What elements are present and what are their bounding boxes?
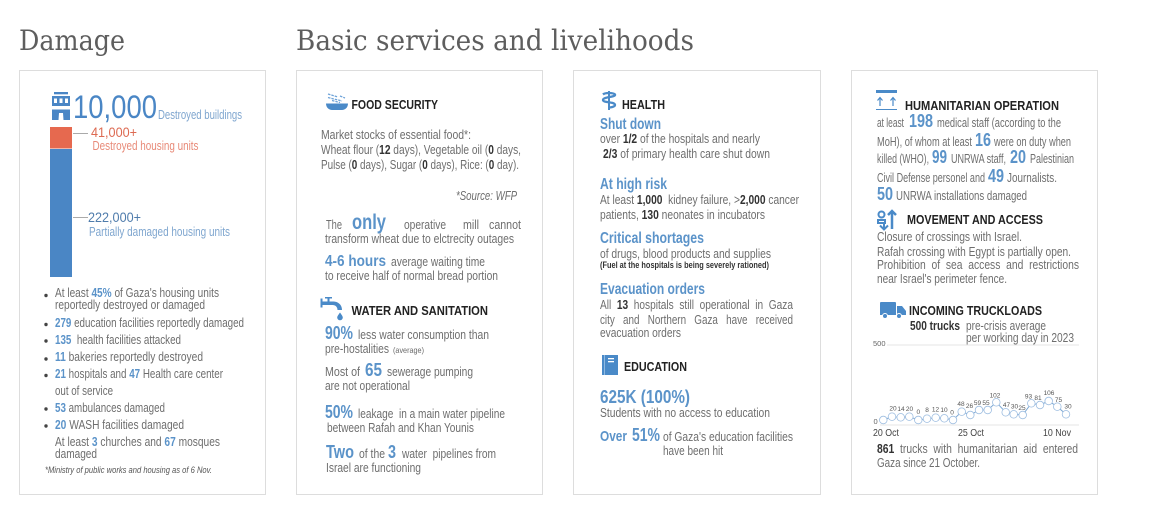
- footnote: ministry source: *Ministry of public works and housing as of 6 Nov.: [45, 465, 212, 475]
- text: staff killed figures: 50: [877, 184, 893, 204]
- callout: only operative mill: only: [352, 211, 386, 234]
- list: damage figures: 11 bakeries reportedly destroyed: [55, 350, 203, 364]
- callout: only operative mill: The: [326, 218, 342, 232]
- block: shut down: Shut down: [600, 116, 661, 133]
- text: staff killed figures: medical staff (according to the: [937, 116, 1061, 130]
- text: staff killed figures: [877, 111, 1074, 204]
- block: at high risk: patients, 130 neonates in incubators: [600, 208, 765, 222]
- block: at high risk: [600, 176, 800, 222]
- text: staff killed figures: at least: [877, 116, 904, 130]
- text: staff killed figures: Palestinian: [1030, 152, 1074, 166]
- chart: daily incoming trucks: 10: [940, 407, 948, 414]
- heading: incoming truckloads: INCOMING TRUCKLOADS: [909, 303, 1042, 318]
- text: market stocks: Wheat flour (12 days), Vegetable oil (0 days,: [321, 143, 521, 157]
- heading: food security: FOOD SECURITY: [352, 97, 438, 112]
- text: staff killed figures: 198: [909, 111, 933, 131]
- icon: truck: [880, 302, 906, 318]
- stat: water pipelines: Israel are functioning: [326, 461, 421, 475]
- text: market stocks: *Source: WFP: [456, 189, 517, 203]
- block: evacuation orders: city and Northern Gaza have received: [600, 313, 793, 327]
- text: staff killed figures: Civil Defense personel and: [877, 171, 985, 185]
- chart: daily incoming trucks: 25: [1018, 405, 1026, 412]
- stat: water consumption: 90%: [325, 323, 353, 343]
- block: evacuation orders: [600, 281, 794, 340]
- stat: destroyed housing units: 41,000+: [91, 124, 137, 140]
- stat: destroyed housing units: Destroyed housing units: [92, 139, 198, 153]
- stat: pre-crisis average: [910, 319, 1074, 345]
- chart: daily incoming trucks: 102: [990, 392, 1001, 400]
- text: crossings and restrictions: Rafah crossing with Egypt is partially open.: [877, 245, 1071, 259]
- stat: pre-crisis average: pre-crisis average: [966, 319, 1046, 333]
- text: market stocks: Market stocks of essential food*:: [321, 128, 471, 142]
- stat: partially damaged housing units: [88, 209, 230, 239]
- panel: health, education: [574, 70, 820, 494]
- icon: medical staff: [603, 91, 615, 110]
- block: shut down: 2/3 of primary health care shut down: [603, 147, 770, 161]
- callout: bread waiting time: 4-6 hours: [325, 253, 386, 270]
- text: staff killed figures: 49: [988, 166, 1004, 186]
- block: critical shortages: [600, 230, 771, 270]
- text: crossings and restrictions: near Israel's perimeter fence.: [877, 272, 1007, 286]
- text: market stocks: [321, 128, 521, 203]
- heading: humanitarian operation: HUMANITARIAN OPERATION: [905, 98, 1059, 113]
- text: crossings and restrictions: Closure of crossings with Israel.: [877, 230, 1022, 244]
- list: damage figures: 20 WASH facilities damaged: [55, 418, 184, 432]
- text: staff killed figures: Journalists.: [1007, 171, 1057, 185]
- block: evacuation orders: Evacuation orders: [600, 281, 705, 298]
- text: crossings and restrictions: Prohibition of sea access and restrictions: [877, 258, 1079, 272]
- text: trucks entered: [877, 442, 1078, 470]
- callout: only operative mill: [325, 211, 521, 246]
- stat: water consumption: pre-hostalities: [325, 342, 389, 356]
- heading: education: EDUCATION: [624, 359, 687, 374]
- icon: book: [602, 355, 618, 375]
- stat: pipeline leakage: leakage in a main water pipeline: [358, 407, 505, 421]
- chart: daily incoming trucks: 20 Oct: [873, 428, 899, 439]
- block: at high risk: At high risk: [600, 176, 667, 193]
- chart: daily incoming trucks: [873, 339, 1079, 439]
- stat: destroyed buildings: Destroyed buildings: [158, 108, 242, 122]
- chart: daily incoming trucks: 14: [897, 406, 905, 413]
- panel: food, water: [296, 70, 542, 494]
- stat: destroyed buildings: [73, 89, 242, 125]
- stat: students without access: 625K (100%): [600, 386, 690, 407]
- stat: water pipelines: water pipelines from: [401, 447, 496, 461]
- text: staff killed figures: killed (WHO),: [877, 152, 929, 166]
- text: staff killed figures: MoH), of whom at least: [877, 135, 972, 149]
- list: damage figures: 135 health facilities attacked: [55, 333, 181, 347]
- stat: sewerage pumping: [325, 359, 473, 393]
- icon: food bowl: [326, 94, 348, 110]
- chart: daily incoming trucks: 48: [957, 401, 965, 408]
- chart: daily incoming trucks: 26: [966, 403, 973, 410]
- heading: health: HEALTH: [622, 97, 665, 112]
- block: at high risk: At least 1,000 kidney failure, >2,000 cancer: [600, 193, 800, 207]
- chart: daily incoming trucks: 500: [873, 339, 886, 348]
- stat: pipeline leakage: [325, 402, 505, 435]
- text: market stocks: Pulse (0 days), Sugar (0 days), Rice: (0 day).: [321, 158, 519, 172]
- stat: sewerage pumping: 65: [365, 359, 382, 380]
- chart: housing units stacked bar: [50, 127, 88, 277]
- callout: only operative mill: mill: [463, 218, 479, 232]
- text: staff killed figures: were on duty when: [993, 135, 1071, 149]
- text: staff killed figures: 99: [932, 147, 947, 167]
- icon: building: [52, 92, 70, 120]
- list: damage figures: out of service: [55, 384, 113, 398]
- chart: daily incoming trucks: 81: [1034, 395, 1042, 402]
- stat: sewerage pumping: sewerage pumping: [387, 365, 473, 379]
- text: crossings and restrictions: [877, 230, 1079, 286]
- stat: sewerage pumping: Most of: [325, 365, 360, 379]
- stat: destroyed housing units: [91, 124, 198, 153]
- stat: pipeline leakage: between Rafah and Khan Younis: [327, 421, 474, 435]
- list: damage figures: damaged: [55, 447, 97, 461]
- block: critical shortages: Critical shortages: [600, 230, 704, 247]
- chart: daily incoming trucks: 30: [1064, 404, 1072, 410]
- callout: bread waiting time: to receive half of normal bread portion: [325, 269, 498, 283]
- heading: Basic services and livelihoods: Basic services and livelihoods: [296, 24, 694, 57]
- callout: bread waiting time: [325, 253, 498, 283]
- stat: water consumption: (average): [393, 345, 424, 355]
- list: damage figures: 279 education facilities reportedly damaged: [55, 316, 244, 330]
- stat: facilities hit: 51%: [632, 425, 660, 445]
- text: trucks entered: Gaza since 21 October.: [877, 456, 980, 470]
- chart: daily incoming trucks: 59: [974, 400, 981, 407]
- stat: destroyed buildings: 10,000: [73, 89, 157, 125]
- stat: facilities hit: of Gaza's education facilities: [663, 430, 793, 444]
- text: staff killed figures: 16: [975, 130, 991, 150]
- callout: only operative mill: cannot: [489, 218, 521, 232]
- callout: bread waiting time: average waiting time: [391, 255, 485, 269]
- list: damage figures: [44, 286, 244, 461]
- stat: pre-crisis average: per working day in 2023: [966, 331, 1074, 345]
- stat: pre-crisis average: 500 trucks: [910, 319, 960, 333]
- text: staff killed figures: UNRWA installations damaged: [896, 189, 1027, 203]
- stat: water pipelines: Two: [326, 441, 354, 462]
- stat: water pipelines: of the: [359, 447, 385, 461]
- stat: students without access: Students with no access to education: [600, 406, 770, 420]
- chart: daily incoming trucks: 0: [916, 409, 920, 416]
- chart: daily incoming trucks: 8: [925, 407, 929, 414]
- icon: humanitarian operation: [876, 90, 897, 110]
- list: damage figures: reportedly destroyed or damaged: [55, 298, 205, 312]
- text: trucks entered: 861 trucks with humanitarian aid entered: [877, 442, 1078, 456]
- stat: pipeline leakage: 50%: [325, 402, 353, 422]
- chart: daily incoming trucks: 106: [1044, 390, 1055, 397]
- block: shut down: over 1/2 of the hospitals and nearly: [600, 132, 761, 146]
- chart: daily incoming trucks: 25 Oct: [958, 428, 984, 439]
- chart: daily incoming trucks: 75: [1055, 397, 1062, 404]
- callout: only operative mill: operative: [404, 218, 446, 232]
- block: evacuation orders: evacuation orders: [600, 326, 681, 340]
- stat: partially damaged housing units: Partially damaged housing units: [89, 225, 230, 239]
- block: evacuation orders: All 13 hospitals still operational in Gaza: [600, 298, 794, 312]
- chart: daily incoming trucks: 55: [982, 400, 990, 407]
- block: critical shortages: (Fuel at the hospitals is being severely rationed): [600, 260, 769, 270]
- text: staff killed figures: UNRWA staff,: [951, 152, 1006, 166]
- chart: daily incoming trucks: 20: [889, 406, 897, 412]
- stat: facilities hit: [600, 425, 793, 458]
- panel: humanitarian, access, trucks: [852, 70, 1098, 494]
- stat: partially damaged housing units: 222,000+: [88, 209, 141, 225]
- block: shut down: [600, 116, 770, 161]
- icon: movement and access: [878, 211, 896, 230]
- heading: Damage: Damage: [19, 24, 125, 57]
- heading: water and sanitation: WATER AND SANITATION: [352, 303, 488, 318]
- stat: water pipelines: 3: [388, 441, 396, 462]
- stat: water consumption: [325, 323, 489, 356]
- chart: daily incoming trucks: 0: [950, 410, 954, 416]
- stat: sewerage pumping: are not operational: [325, 379, 410, 393]
- panel: damage: [20, 70, 266, 494]
- chart: daily incoming trucks: 20: [906, 406, 913, 413]
- icon: water tap: [320, 297, 343, 320]
- callout: only operative mill: transform wheat due to elctrecity outages: [325, 232, 514, 246]
- stat: water pipelines: [326, 441, 496, 475]
- text: staff killed figures: 20: [1010, 147, 1026, 167]
- chart: daily incoming trucks: 0: [874, 417, 878, 426]
- heading: movement and access: MOVEMENT AND ACCESS: [907, 212, 1043, 227]
- stat: water consumption: less water consumption than: [358, 328, 489, 342]
- list: damage figures: 21 hospitals and 47 Health care center: [55, 367, 224, 381]
- chart: daily incoming trucks: 10 Nov: [1043, 428, 1071, 439]
- list: damage figures: At least 45% of Gaza's housing units: [55, 286, 219, 300]
- stat: facilities hit: Over: [600, 428, 627, 445]
- block: critical shortages: of drugs, blood products and supplies: [600, 247, 771, 261]
- stat: students without access: [600, 386, 770, 420]
- chart: daily incoming trucks: 47: [1003, 402, 1010, 409]
- stat: facilities hit: have been hit: [663, 444, 723, 458]
- list: damage figures: At least 3 churches and 67 mosques: [55, 435, 220, 449]
- chart: daily incoming trucks: 12: [932, 406, 939, 414]
- chart: daily incoming trucks: 30: [1011, 404, 1018, 410]
- list: damage figures: 53 ambulances damaged: [55, 401, 165, 415]
- chart: daily incoming trucks: 93: [1025, 394, 1032, 400]
